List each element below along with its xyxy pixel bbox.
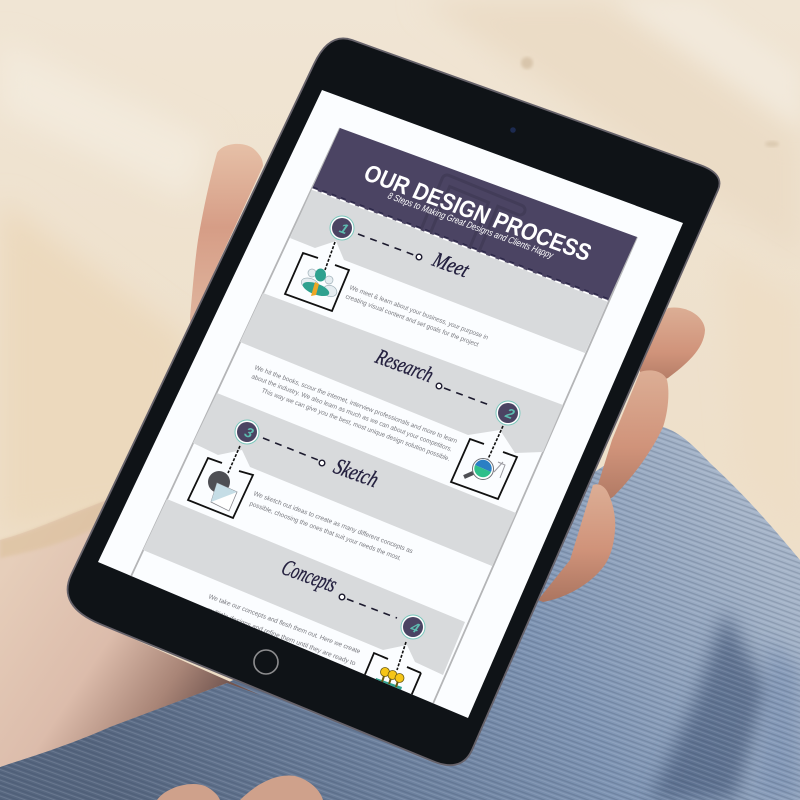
connector 4 [347, 599, 397, 618]
badge 4 [401, 615, 425, 639]
badge 3: 3 [242, 424, 256, 441]
text 3: We sketch out ideas to create as many different concepts as [252, 490, 415, 555]
connector end 4 [339, 594, 345, 600]
step 1: Meet [285, 216, 490, 349]
finger: right hand middle [590, 370, 668, 510]
heading Meet: Meet [428, 247, 474, 282]
jeans [0, 427, 800, 800]
heading Concepts: Concepts [278, 554, 341, 597]
step 4: Concepts [208, 561, 426, 695]
band 4 [143, 499, 465, 675]
infographic on screen [120, 128, 637, 722]
badge 2 [496, 401, 520, 425]
heading Research: Research [371, 344, 438, 387]
banner [312, 128, 637, 301]
finger: right hand index [640, 307, 705, 390]
tablet body [68, 38, 720, 765]
stem 3 [228, 446, 240, 473]
connector 2 [444, 388, 492, 406]
text 3: possible, choosing the ones that suit your needs the most. [248, 500, 403, 562]
frame 4 [350, 653, 421, 710]
step 3: Sketch [188, 420, 415, 562]
subtitle: 8 Steps to Making Great Designs and Clients Happy [386, 191, 556, 261]
connector end 3 [319, 460, 325, 466]
connector end 1 [416, 254, 422, 260]
banner ghost icon [420, 180, 520, 265]
band 1 [290, 189, 608, 353]
badge 1: 1 [337, 220, 351, 237]
infographic side borders [120, 128, 637, 722]
camera [510, 127, 516, 133]
finger: left hand, top [190, 144, 263, 330]
title: OUR DESIGN PROCESS [359, 160, 595, 267]
stem 4 [397, 642, 406, 670]
stem 1 [325, 242, 335, 270]
screen [98, 90, 683, 718]
badge 1 [330, 216, 354, 240]
forearm [0, 500, 260, 767]
band 2 [240, 293, 563, 453]
text 1: creating visual content and set goals for the project [344, 293, 480, 349]
icon: magnifier [464, 458, 505, 480]
icon: light bulbs [372, 668, 404, 700]
badge 4: 4 [407, 619, 422, 636]
icon: team [301, 268, 338, 298]
text 2: about the industry. We also learn as much as we can about your competitors. [250, 373, 453, 453]
home button [254, 650, 278, 674]
text 1: We meet & learn about your business, your purpose in [348, 284, 490, 342]
badge 3 [235, 420, 259, 444]
connector 1 [358, 234, 414, 255]
badge 2: 2 [502, 405, 517, 422]
step 2: Research [250, 344, 520, 499]
frame 3 [188, 458, 253, 518]
band 3 [193, 393, 516, 566]
frame 1 [285, 253, 349, 311]
heading Sketch: Sketch [330, 453, 383, 492]
finger: right hand ring [538, 484, 615, 602]
icon: sketch shapes [208, 471, 237, 511]
connector 3 [263, 438, 318, 460]
text 2: This way we can give you the best, most unique design solution possible. [260, 387, 451, 463]
text 4: multiple designs and refine them until they are ready to [205, 606, 357, 667]
connector end 2 [436, 383, 442, 389]
banner dashed edge [312, 189, 608, 301]
stem 2 [488, 426, 503, 459]
text 2: We hit the books, scour the internet, interview professionals and more to learn [253, 364, 458, 445]
frame 2 [451, 439, 517, 499]
text 4: We take our concepts and flesh them out. Here we create [207, 593, 362, 655]
tablet [68, 38, 720, 765]
fingers at the bottom [157, 776, 323, 800]
